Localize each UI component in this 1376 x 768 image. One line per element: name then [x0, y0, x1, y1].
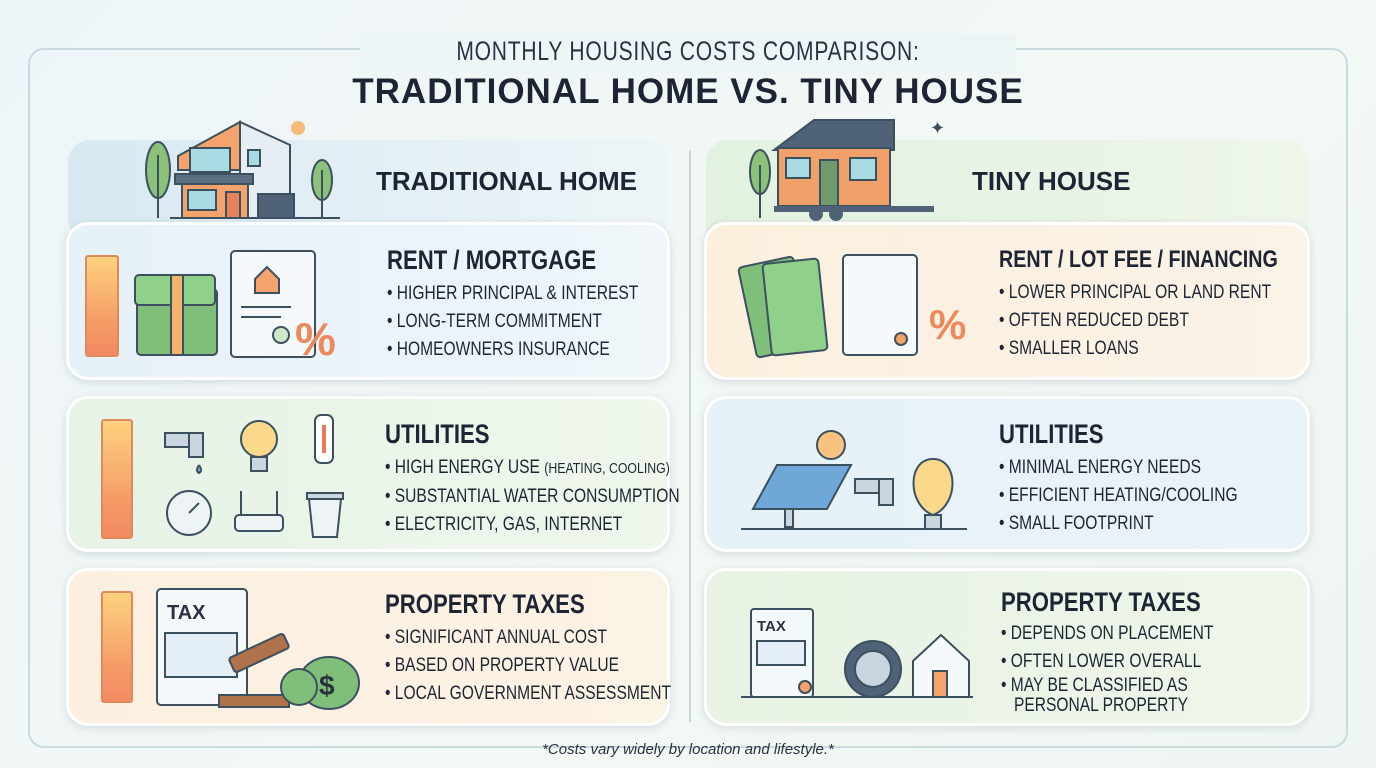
text: utilities: SUBSTANTIAL WATER CONSUMPTION — [395, 486, 680, 507]
cost bar — [85, 255, 119, 357]
text: utilities — [999, 419, 1238, 534]
text: utilities: ELECTRICITY, GAS, INTERNET — [395, 514, 622, 535]
icon: modern house — [145, 120, 340, 219]
icons: tax doc, wheel, house — [741, 608, 973, 698]
panel: tiny utilities — [704, 396, 1310, 552]
title: MONTHLY HOUSING COSTS COMPARISON: — [456, 36, 920, 66]
text: rent / lot fee: OFTEN REDUCED DEBT — [1009, 310, 1189, 331]
footnote: *Costs vary widely by location and lifestyle.* — [542, 741, 834, 758]
text: rent/mortgage: HOMEOWNERS INSURANCE — [397, 339, 610, 360]
text: property taxes: MAY BE CLASSIFIED AS — [1011, 675, 1188, 696]
cost bar — [101, 419, 133, 539]
text: utilities: MINIMAL ENERGY NEEDS — [1009, 457, 1201, 478]
text: property taxes: BASED ON PROPERTY VALUE — [395, 655, 619, 676]
text: property taxes: PROPERTY TAXES — [1001, 587, 1201, 617]
cost bar — [101, 591, 133, 703]
text: utilities — [385, 419, 680, 535]
text: rent/mortgage — [387, 245, 638, 360]
icons: cash and document: % — [929, 301, 966, 348]
panel: traditional rent/mortgage — [66, 222, 670, 380]
text: rent/mortgage: HIGHER PRINCIPAL & INTEREST — [397, 283, 638, 304]
text: property taxes — [385, 589, 671, 704]
panel: tiny rent/lot fee — [704, 222, 1310, 380]
text: rent/mortgage: LONG-TERM COMMITMENT — [397, 311, 602, 332]
panel header: tiny house — [706, 140, 1308, 250]
icons: cash and document — [738, 254, 966, 358]
main title: TRADITIONAL HOME VS. TINY HOUSE — [352, 72, 1024, 111]
text: utilities: UTILITIES — [385, 419, 490, 449]
icons: tax form, gavel, money bags: $ — [319, 670, 335, 701]
text: utilities: UTILITIES — [999, 419, 1104, 449]
icons: tax form, gavel, money bags — [156, 588, 360, 710]
text: property taxes: SIGNIFICANT ANNUAL COST — [395, 627, 607, 648]
panel: tiny property taxes — [704, 568, 1310, 726]
text: rent / lot fee — [999, 246, 1278, 359]
text: rent / lot fee: RENT / LOT FEE / FINANCING — [999, 246, 1278, 273]
panel: traditional utilities — [66, 396, 670, 552]
text: rent / lot fee: LOWER PRINCIPAL OR LAND RENT — [1009, 282, 1271, 303]
icons: tax doc, wheel, house: TAX — [757, 618, 786, 635]
title — [360, 34, 1016, 74]
divider — [689, 150, 691, 722]
text: utilities: HIGH ENERGY USE (HEATING, COOLING) — [395, 457, 670, 478]
text: rent / lot fee: SMALLER LOANS — [1009, 338, 1139, 359]
icons: solar panel, faucet, bulb — [741, 430, 967, 530]
icon: money stack and document — [134, 250, 336, 363]
icons: faucet, bulb, thermometer, meter, router, bin — [164, 414, 344, 538]
text: property taxes: OFTEN LOWER OVERALL — [1011, 651, 1201, 672]
text: property taxes: PERSONAL PROPERTY — [1014, 695, 1188, 716]
text: property taxes: LOCAL GOVERNMENT ASSESSMENT — [395, 683, 671, 704]
icons: tax form, gavel, money bags: TAX — [167, 602, 206, 624]
text: utilities: EFFICIENT HEATING/COOLING — [1009, 485, 1238, 506]
heading: tiny house: TINY HOUSE — [972, 166, 1130, 196]
heading: traditional home: TRADITIONAL HOME — [376, 166, 637, 196]
text: property taxes — [1001, 587, 1214, 716]
text: utilities: SMALL FOOTPRINT — [1009, 513, 1154, 534]
panel header: traditional home — [68, 140, 668, 240]
icon: tiny house on trailer — [749, 118, 944, 221]
text: property taxes: PROPERTY TAXES — [385, 589, 585, 619]
text: property taxes: DEPENDS ON PLACEMENT — [1011, 623, 1213, 644]
panel: traditional property taxes — [66, 568, 670, 726]
text: rent/mortgage: RENT / MORTGAGE — [387, 245, 596, 275]
